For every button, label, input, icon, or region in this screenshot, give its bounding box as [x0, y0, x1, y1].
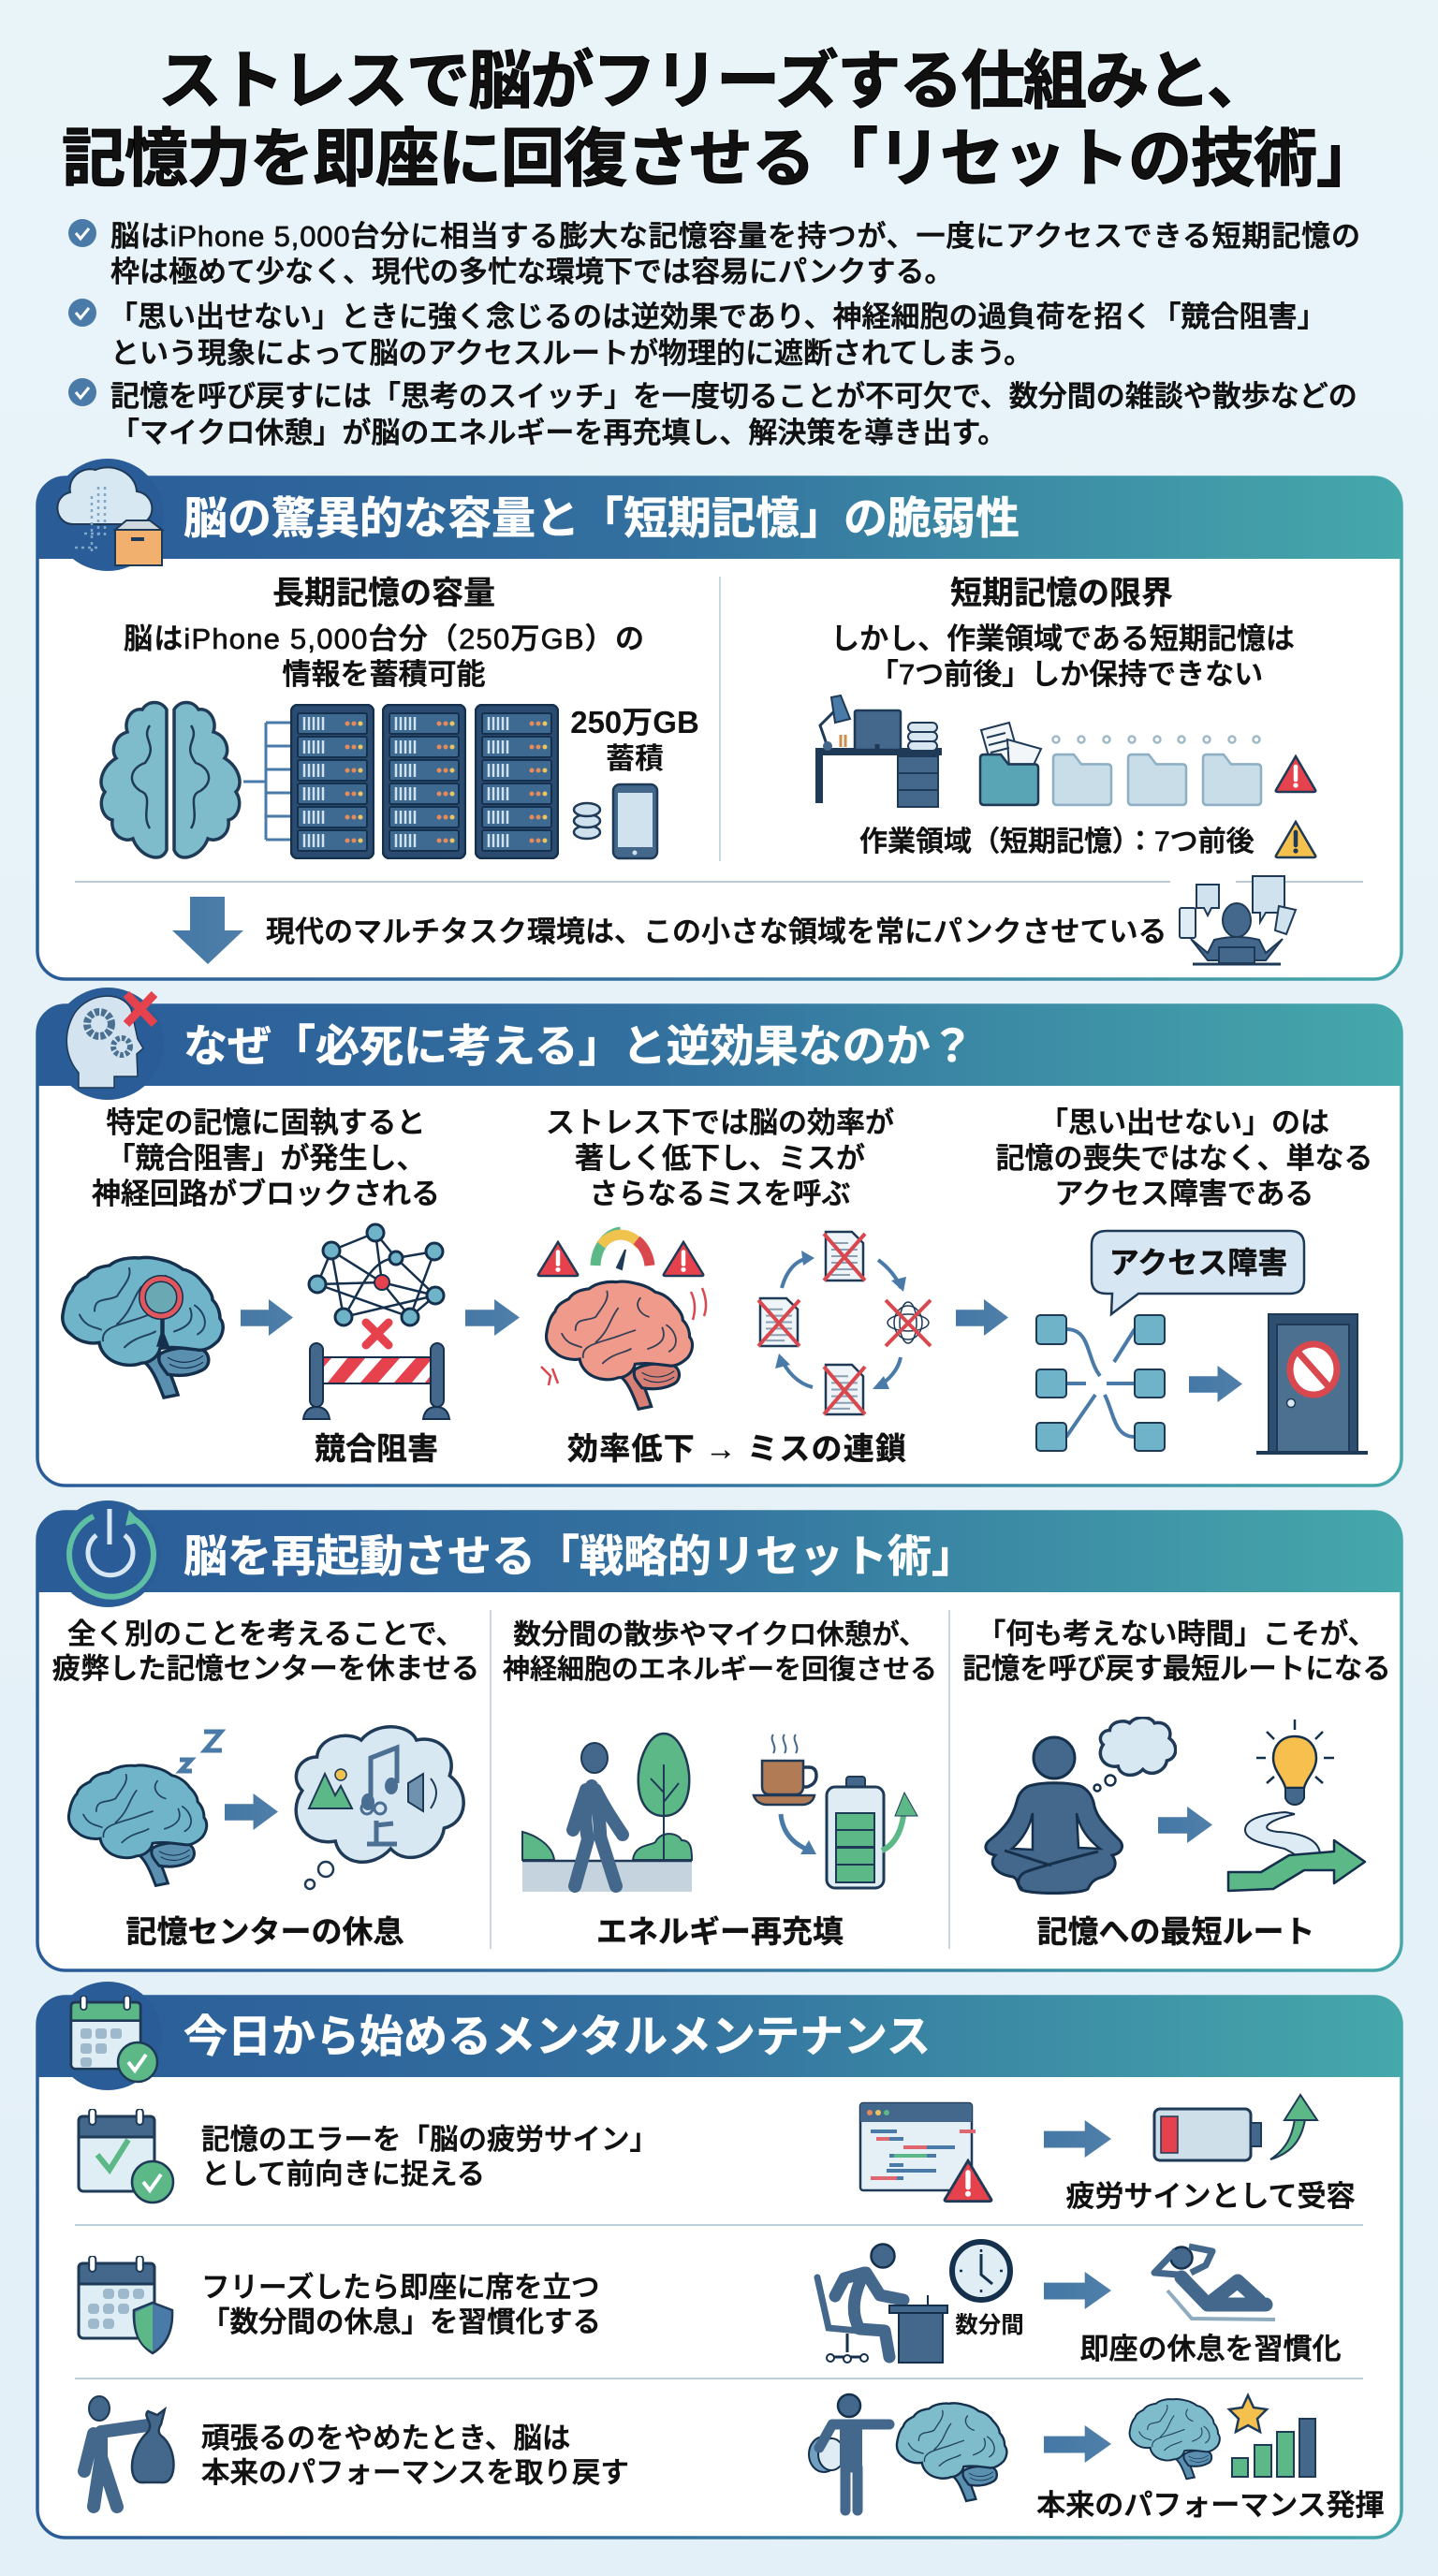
panel: mental maintenance [37, 1982, 1402, 2538]
callout: access failure: アクセス障害 [1109, 1246, 1287, 1280]
row text [201, 2124, 658, 2190]
column 2 text: ストレス下では脳の効率が [546, 1106, 894, 1139]
storage label: 250万GB [570, 705, 699, 739]
caption: 記憶への最短ルート [1037, 1914, 1314, 1949]
summary bullets [68, 219, 1360, 449]
column 1 text [52, 1618, 479, 1685]
icon: person leaving desk [817, 2245, 947, 2363]
working memory label: 作業領域（短期記憶）：7つ前後 [859, 827, 1255, 857]
section heading: 脳を再起動させる「戦略的リセット術」 [183, 1531, 976, 1581]
icon: route [1228, 1812, 1365, 1891]
bullet 1: 脳はiPhone 5,000台分に相当する膨大な記憶容量を持つが、一度にアクセスできる短期記憶の [110, 220, 1360, 253]
icon: calendar check [79, 2109, 173, 2203]
caption: 疲労サインとして受容 [1065, 2180, 1356, 2213]
column 1 text: 疲弊した記憶センターを休ませる [52, 1653, 479, 1685]
column 3 text: 記憶の喪失ではなく、単なる [996, 1142, 1372, 1175]
icon: barrier [303, 1343, 449, 1419]
arrow [241, 1299, 293, 1336]
icon: coffee [754, 1734, 816, 1805]
long-term memory heading: 長期記憶の容量 [272, 576, 495, 611]
long-term memory text: 情報を蓄積可能 [283, 658, 485, 691]
title: 記憶力を即座に回復させる「リセットの技術」 [62, 124, 1380, 195]
column 2 text: 神経細胞のエネルギーを回復させる [503, 1654, 937, 1685]
short-term memory text: 「7つ前後」しか保持できない [870, 658, 1263, 691]
short-term memory text [830, 622, 1295, 691]
arrow [225, 1793, 278, 1830]
short-term memory text: しかし、作業領域である短期記憶は [830, 622, 1295, 655]
icon: reclining person [1154, 2247, 1275, 2320]
row text: 本来のパフォーマンスを取り戻す [201, 2457, 629, 2489]
icon: phone [613, 784, 657, 858]
arrow [1044, 2120, 1111, 2158]
long-term memory text [124, 622, 644, 691]
row text: フリーズしたら即座に席を立つ [201, 2272, 599, 2304]
small label: 数分間 [955, 2312, 1024, 2338]
bullet 2: という現象によって脳のアクセスルートが物理的に遮断されてしまう。 [110, 337, 1033, 370]
short-term memory heading: 短期記憶の限界 [950, 576, 1173, 611]
arrow [1044, 2272, 1111, 2309]
arrow [465, 1299, 520, 1336]
bullet 3: 記憶を呼び戻すには「思考のスイッチ」を一度切ることが不可欠で、数分間の雑談や散歩などの [110, 380, 1357, 413]
icon: meditating person [986, 1737, 1123, 1893]
icon: error cycle [758, 1232, 931, 1414]
row text [201, 2422, 629, 2489]
column 2 text: 数分間の散歩やマイクロ休憩が、 [513, 1619, 927, 1650]
column 2 text [546, 1106, 894, 1210]
icon: papers [981, 723, 1041, 777]
icon: person and brain [809, 2394, 1006, 2510]
title: ストレスで脳がフリーズする仕組みと、 [158, 46, 1270, 117]
row text: として前向きに捉える [201, 2159, 485, 2190]
column 3 text: アクセス障害である [1054, 1178, 1314, 1210]
column 1 text: 神経回路がブロックされる [92, 1178, 440, 1210]
icon: gauge and warnings [538, 1232, 703, 1276]
row text: 頑張るのをやめたとき、脳は [201, 2422, 570, 2454]
caption: 即座の休息を習慣化 [1080, 2333, 1341, 2365]
caption: 本来のパフォーマンス発揮 [1036, 2489, 1385, 2522]
icon: battery charging [781, 1777, 917, 1888]
icon: head with gears [51, 988, 164, 1100]
icon: red warning [1276, 756, 1315, 792]
row text: 記憶のエラーを「脳の疲労サイン」 [201, 2124, 658, 2156]
icon: clock [952, 2242, 1010, 2300]
callout: access failure [1092, 1231, 1304, 1314]
icon: calendar shield [79, 2256, 172, 2353]
icon: stressed brain [541, 1281, 706, 1409]
section heading: 脳の驚異的な容量と「短期記憶」の脆弱性 [183, 493, 1020, 543]
icon: database [574, 803, 600, 839]
storage label [570, 705, 699, 775]
long-term memory text: 脳はiPhone 5,000台分（250万GB）の [124, 622, 644, 655]
column 3 text [996, 1106, 1372, 1210]
icon: top-view brain [101, 702, 240, 857]
icon: brain with star and bars [1130, 2395, 1315, 2479]
connector lines [243, 723, 290, 840]
arrow: down [172, 897, 243, 964]
icon: code error window [860, 2103, 991, 2202]
column 2 text: 著しく低下し、ミスが [575, 1142, 865, 1175]
caption: 記憶センターの休息 [125, 1914, 404, 1949]
column 3 text: 「何も考えない時間」こそが、 [977, 1618, 1376, 1650]
icon: person dropping bag [84, 2396, 174, 2507]
icon: desk [815, 695, 942, 807]
bullet 2 [68, 299, 1326, 370]
icon: red x [366, 1323, 389, 1345]
column 1 text: 全く別のことを考えることで、 [67, 1618, 464, 1650]
title [62, 46, 1380, 195]
icon: power symbol [54, 1500, 161, 1607]
column 1 text: 「競合阻害」が発生し、 [107, 1142, 425, 1175]
storage label: 蓄積 [606, 742, 664, 775]
icon: multitasking person [1180, 876, 1296, 964]
row text: 「数分間の休息」を習慣化する [201, 2306, 601, 2338]
caption: 効率低下 → ミスの連鎖 [567, 1431, 906, 1466]
icon: broken routes [1036, 1315, 1165, 1451]
icon: yellow warning [1276, 822, 1315, 857]
arrow [956, 1299, 1008, 1336]
caption: エネルギー再充填 [596, 1914, 844, 1949]
icon: walking in park [522, 1734, 692, 1892]
arrow [1189, 1366, 1242, 1402]
arrow [1158, 1807, 1212, 1843]
icon: low battery [1154, 2095, 1317, 2160]
caption: 競合阻害 [315, 1431, 438, 1466]
column 1 text: 特定の記憶に固執すると [107, 1106, 425, 1139]
bullet 3: 「マイクロ休憩」が脳のエネルギーを再充填し、解決策を導き出す。 [110, 417, 1006, 449]
icon: light bulb [1256, 1720, 1334, 1805]
icon: folders [980, 754, 1261, 805]
row 2 [79, 2242, 1342, 2365]
row 3 [84, 2394, 1385, 2522]
column 2 text: さらなるミスを呼ぶ [590, 1178, 850, 1210]
column 3 text: 記憶を呼び戻す最短ルートになる [962, 1653, 1391, 1685]
icon: locked door [1256, 1314, 1368, 1453]
icon: calendar with check [53, 1982, 162, 2090]
icon: cloud and box [51, 459, 164, 571]
icon: brain with target [63, 1257, 223, 1398]
section heading: なぜ「必死に考える」と逆効果なのか？ [183, 1021, 975, 1071]
bullet 3 [68, 378, 1357, 449]
panel: strategic reset [37, 1500, 1402, 1970]
row 1 [79, 2095, 1356, 2213]
bullet 2: 「思い出せない」ときに強く念じるのは逆効果であり、神経細胞の過負荷を招く「競合阻害」 [109, 300, 1326, 333]
icon: small thought cloud [1093, 1718, 1176, 1792]
arrow [1044, 2425, 1111, 2463]
bullet 1 [68, 219, 1360, 288]
section heading: 今日から始めるメンタルメンテナンス [183, 2012, 931, 2061]
icon: resting brain [68, 1732, 222, 1885]
panel: brain capacity and short-term memory [37, 459, 1402, 979]
panel: why thinking hard backfires [37, 988, 1402, 1486]
column 1 text [92, 1106, 440, 1210]
bullet 1: 枠は極めて少なく、現代の多忙な環境下では容易にパンクする。 [110, 256, 954, 288]
icon: thought cloud [296, 1727, 463, 1889]
icon: server racks [291, 705, 558, 858]
row text [201, 2272, 601, 2338]
multitask text: 現代のマルチタスク環境は、この小さな領域を常にパンクさせている [266, 915, 1167, 948]
icon: neural network [309, 1224, 444, 1325]
column 2 text [503, 1619, 937, 1685]
column 3 text: 「思い出せない」のは [1039, 1106, 1329, 1139]
dots [1052, 736, 1260, 743]
column 3 text [962, 1618, 1391, 1685]
